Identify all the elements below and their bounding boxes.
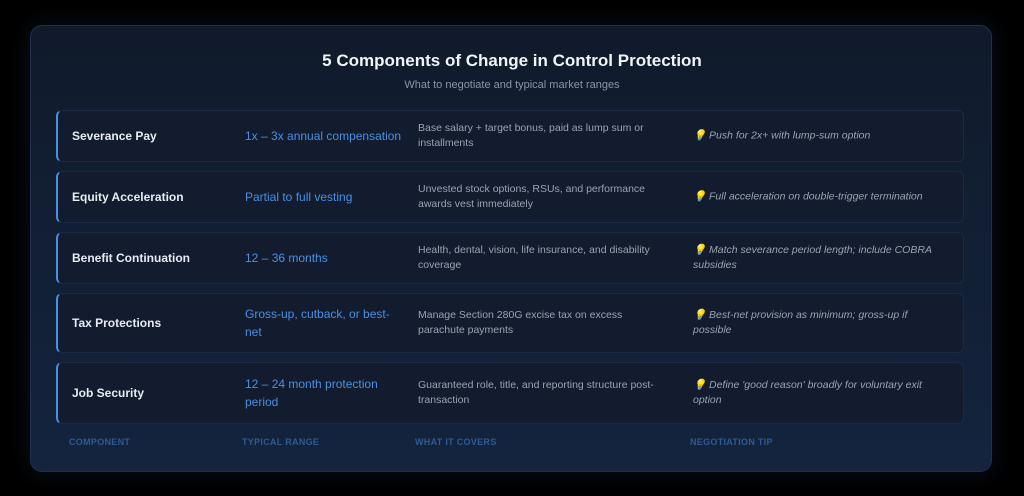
row: job security: 💡 Define 'good reason' broadly for voluntary exit option: [693, 379, 922, 406]
row: tax protections: Gross-up, cutback, or best-: [245, 307, 390, 321]
row: severance pay: Severance Pay: [72, 129, 157, 143]
row: benefit continuation: 12 – 36 months: [245, 251, 328, 265]
subtitle: What to negotiate and typical market ranges: [404, 79, 620, 91]
column headers: COMPONENT: [69, 437, 130, 447]
row: benefit continuation: [56, 232, 964, 284]
row: equity acceleration: 💡 Full acceleration on double-trigger termination: [693, 190, 923, 202]
row: job security: 12 – 24 month protection period: [245, 377, 378, 409]
column headers: TYPICAL RANGE: [242, 437, 319, 447]
row: benefit continuation: Health, dental, vision, life insurance, and disability coverage: [418, 244, 650, 271]
row: equity acceleration: [56, 171, 964, 223]
row: tax protections: net: [245, 325, 262, 339]
row: equity acceleration: Partial to full vesting: [245, 190, 352, 204]
row: severance pay: [56, 110, 964, 162]
column headers: [69, 437, 773, 447]
row: tax protections: Manage Section 280G excise tax on excess: [418, 309, 622, 321]
column headers: WHAT IT COVERS: [415, 437, 497, 447]
row: benefit continuation: Benefit Continuation: [72, 251, 190, 265]
column headers: NEGOTIATION TIP: [690, 437, 773, 447]
row: benefit continuation: 💡 Match severance period length; include COBRA subsidies: [693, 244, 932, 271]
row: equity acceleration: Unvested stock options, RSUs, and performance awards vest immediately: [418, 183, 645, 210]
row: job security: Guaranteed role, title, and reporting structure post-transaction: [418, 379, 654, 406]
row: job security: [56, 362, 964, 424]
row: severance pay: 1x – 3x annual compensation: [245, 129, 401, 143]
row: equity acceleration: Equity Acceleration: [72, 190, 184, 204]
row: severance pay: Base salary + target bonus, paid as lump sum or installments: [418, 122, 644, 149]
row: severance pay: 💡 Push for 2x+ with lump-sum option: [693, 130, 870, 142]
row: tax protections: parachute payments: [418, 324, 513, 336]
row: tax protections: Tax Protections: [72, 316, 161, 330]
row: job security: Job Security: [72, 386, 144, 400]
title: 5 Components of Change in Control Protection: [322, 51, 702, 70]
row: tax protections: [56, 293, 964, 353]
row: tax protections: 💡 Best-net provision as minimum; gross-up if possible: [693, 309, 907, 336]
